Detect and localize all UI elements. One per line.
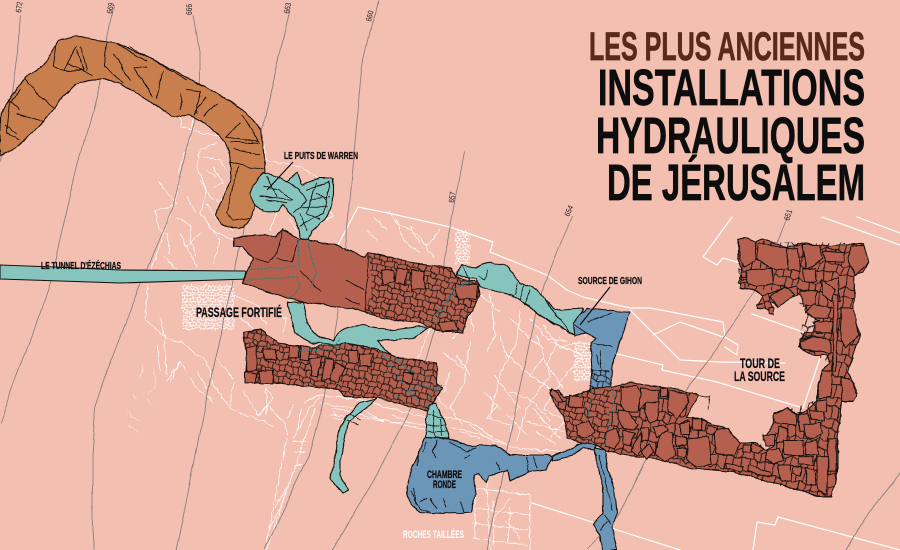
blue channel arc — [552, 442, 597, 461]
orange rock formation — [0, 36, 265, 229]
teal: le puits de Warren — [250, 172, 333, 240]
elevation labels: 654 — [563, 204, 575, 218]
elevation labels: 669 — [105, 2, 116, 14]
label: source de Gihon: SOURCE DE GIHON — [578, 276, 642, 287]
elevation labels: 657 — [447, 191, 458, 203]
label: roches taillees: ROCHES TAILLÉES — [403, 528, 464, 541]
elevation labels: 666 — [185, 4, 194, 15]
label: tour de la source: LA SOURCE — [734, 368, 785, 384]
label: tour de la source — [734, 355, 785, 384]
elevation labels — [14, 1, 794, 222]
large L-shaped rock block: tour de la source — [550, 238, 868, 497]
title — [589, 25, 865, 211]
label: tour de la source: TOUR DE — [740, 355, 780, 371]
teal neck above chamber — [425, 403, 450, 438]
upper left rock block — [233, 229, 480, 332]
label: chambre ronde: RONDE — [433, 479, 456, 491]
blue channel going south — [593, 448, 617, 550]
label: passage fortifie: PASSAGE FORTIFIÉ — [196, 304, 282, 320]
leader arrow: source de Gihon — [580, 287, 610, 325]
building outlines in white — [338, 207, 900, 550]
white excavation lines — [128, 117, 596, 550]
leader arrow: puits de Warren — [267, 162, 293, 190]
elevation labels: 660 — [364, 9, 376, 22]
label: chambre ronde — [427, 469, 462, 491]
label: le tunnel d'Ezechias: LE TUNNEL D'ÉZÉCHIAS — [41, 259, 121, 272]
label: le puits de Warren: LE PUITS DE WARREN — [284, 151, 358, 162]
aqueduct: le tunnel d'Ezechias — [0, 265, 249, 283]
blue: chambre ronde — [406, 437, 552, 514]
blue: source de Gihon — [573, 308, 630, 390]
teal lower tail — [331, 399, 377, 493]
lower left rock block — [243, 329, 442, 410]
teal passage — [288, 302, 428, 355]
teal upper-right passage to Gihon — [457, 263, 583, 335]
label: chambre ronde: CHAMBRE — [427, 469, 462, 481]
elevation labels: 651 — [782, 208, 794, 222]
